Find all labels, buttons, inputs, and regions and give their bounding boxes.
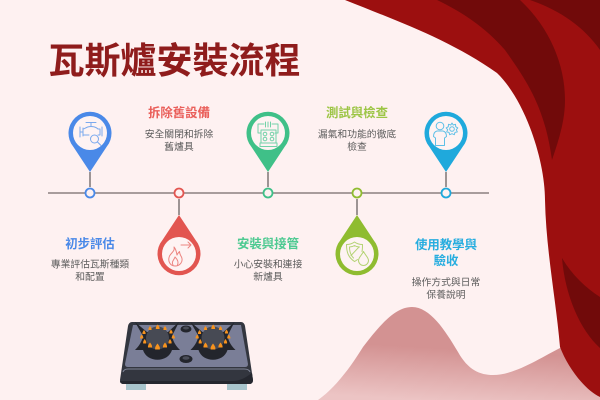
- icon: shield and drop: [346, 242, 368, 266]
- pin: step 1: [68, 112, 112, 198]
- burner right: [190, 322, 236, 360]
- step 4 description: 漏氣和功能的徹底: [318, 128, 396, 140]
- step 5 description: 操作方式與日常: [412, 276, 480, 288]
- step 1 description: 專業評估瓦斯種類: [51, 258, 129, 270]
- step 4: test and inspect: [318, 105, 396, 275]
- timeline axis: [48, 192, 489, 194]
- pin: step 4: [336, 188, 378, 275]
- step 2 description: 舊爐具: [164, 140, 194, 153]
- decorative red wave: [345, 0, 600, 397]
- knobs: [180, 326, 192, 363]
- step 2: remove old equipment: [145, 105, 213, 275]
- title: 瓦斯爐安裝流程: [48, 40, 301, 81]
- step 1 description: 和配置: [75, 271, 105, 283]
- icon: pipe with magnifier: [80, 122, 102, 146]
- step 1: initial assessment: [51, 112, 129, 283]
- pin: step 5: [424, 112, 468, 198]
- step 3: install and connect: [234, 112, 302, 283]
- step 5: training and acceptance: [412, 112, 480, 301]
- step 3 heading: 安裝與接管: [237, 236, 299, 251]
- step 3 description: 小心安裝和連接: [234, 258, 302, 270]
- step 1 heading: 初步評估: [65, 236, 115, 251]
- pin: step 2: [158, 188, 200, 275]
- icon: person with gear: [434, 122, 458, 146]
- step 5 heading: 使用教學與: [415, 237, 477, 252]
- burner left: [135, 322, 180, 360]
- pin: step 3: [247, 112, 290, 198]
- icon: flame with arrow: [169, 242, 191, 266]
- illustration: gas stove: [120, 322, 253, 390]
- step 2 description: 安全關閉和拆除: [145, 128, 213, 140]
- icon: stove: [258, 122, 278, 146]
- decorative hill: [318, 307, 600, 400]
- step 2 heading: 拆除舊設備: [148, 105, 210, 120]
- step 4 description: 檢查: [347, 140, 367, 153]
- step 3 description: 新爐具: [253, 270, 283, 283]
- step 4 heading: 測試與檢查: [326, 105, 388, 120]
- step 5 description: 保養說明: [426, 288, 466, 301]
- step 5 heading: 驗收: [434, 253, 459, 268]
